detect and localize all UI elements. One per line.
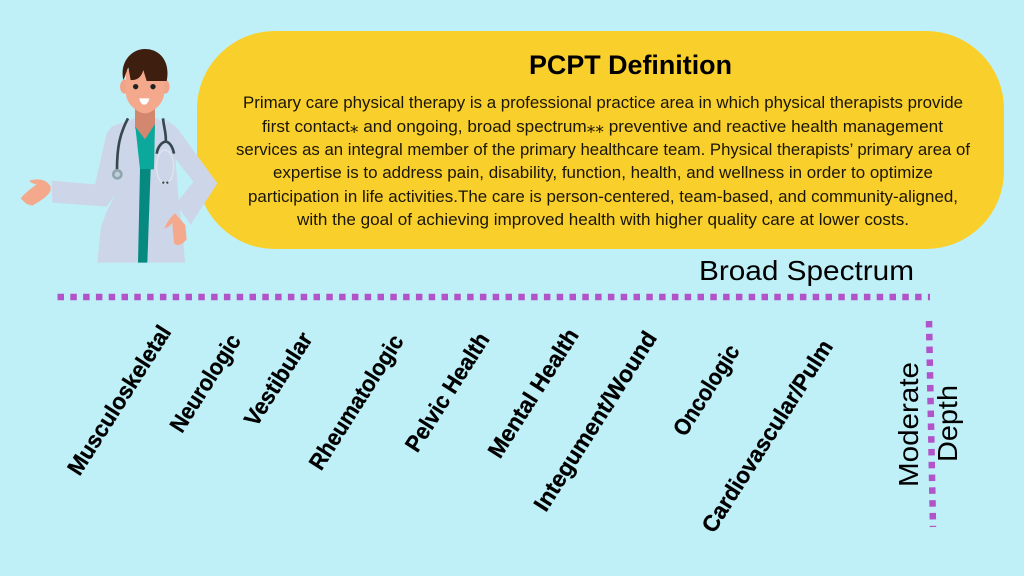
text block: definition: Primary care physical therapy is a professional practice area in which physical therapists provide — [243, 93, 963, 112]
text block: definition: expertise is to address pain, disability, function, health, and wellness in order to optimize — [273, 163, 933, 182]
label: Vestibular: Vestibular — [239, 327, 317, 431]
icon: doctor illustration — [21, 49, 217, 263]
label: Mental Health: Mental Health — [482, 324, 584, 462]
text block: definition: first contact⁎ and ongoing, broad spectrum⁎⁎ preventive and reactive health management — [262, 117, 943, 136]
axis: vertical dotted line — [929, 321, 933, 527]
label: Cardiovascular/Pulm: Cardiovascular/Pulm — [696, 335, 838, 537]
label: Integument/Wound: Integument/Wound — [528, 326, 662, 516]
text block: definition — [236, 93, 970, 229]
text block: definition: participation in life activities.The care is person-centered, team-based, and community-aligned, — [248, 187, 958, 206]
heading: Broad Spectrum: Broad Spectrum — [699, 255, 914, 286]
panel: definition bubble — [197, 31, 1004, 249]
label: Moderate: Moderate — [893, 362, 924, 487]
label: Oncologic: Oncologic — [667, 339, 745, 440]
heading: PCPT Definition: PCPT Definition — [529, 50, 732, 80]
text block: definition: with the goal of achieving improved health with higher quality care at lower costs. — [296, 210, 909, 229]
label: Depth: Depth — [932, 385, 963, 462]
label: Neurologic: Neurologic — [164, 329, 246, 437]
label: Musculoskeletal: Musculoskeletal — [62, 320, 176, 480]
label: Rheumatologic: Rheumatologic — [303, 329, 409, 474]
axis: horizontal dotted line — [58, 294, 930, 300]
text block: definition: services as an integral member of the primary healthcare team. Physical therapists’ primary area of — [236, 140, 970, 159]
label: Pelvic Health: Pelvic Health — [399, 328, 495, 456]
